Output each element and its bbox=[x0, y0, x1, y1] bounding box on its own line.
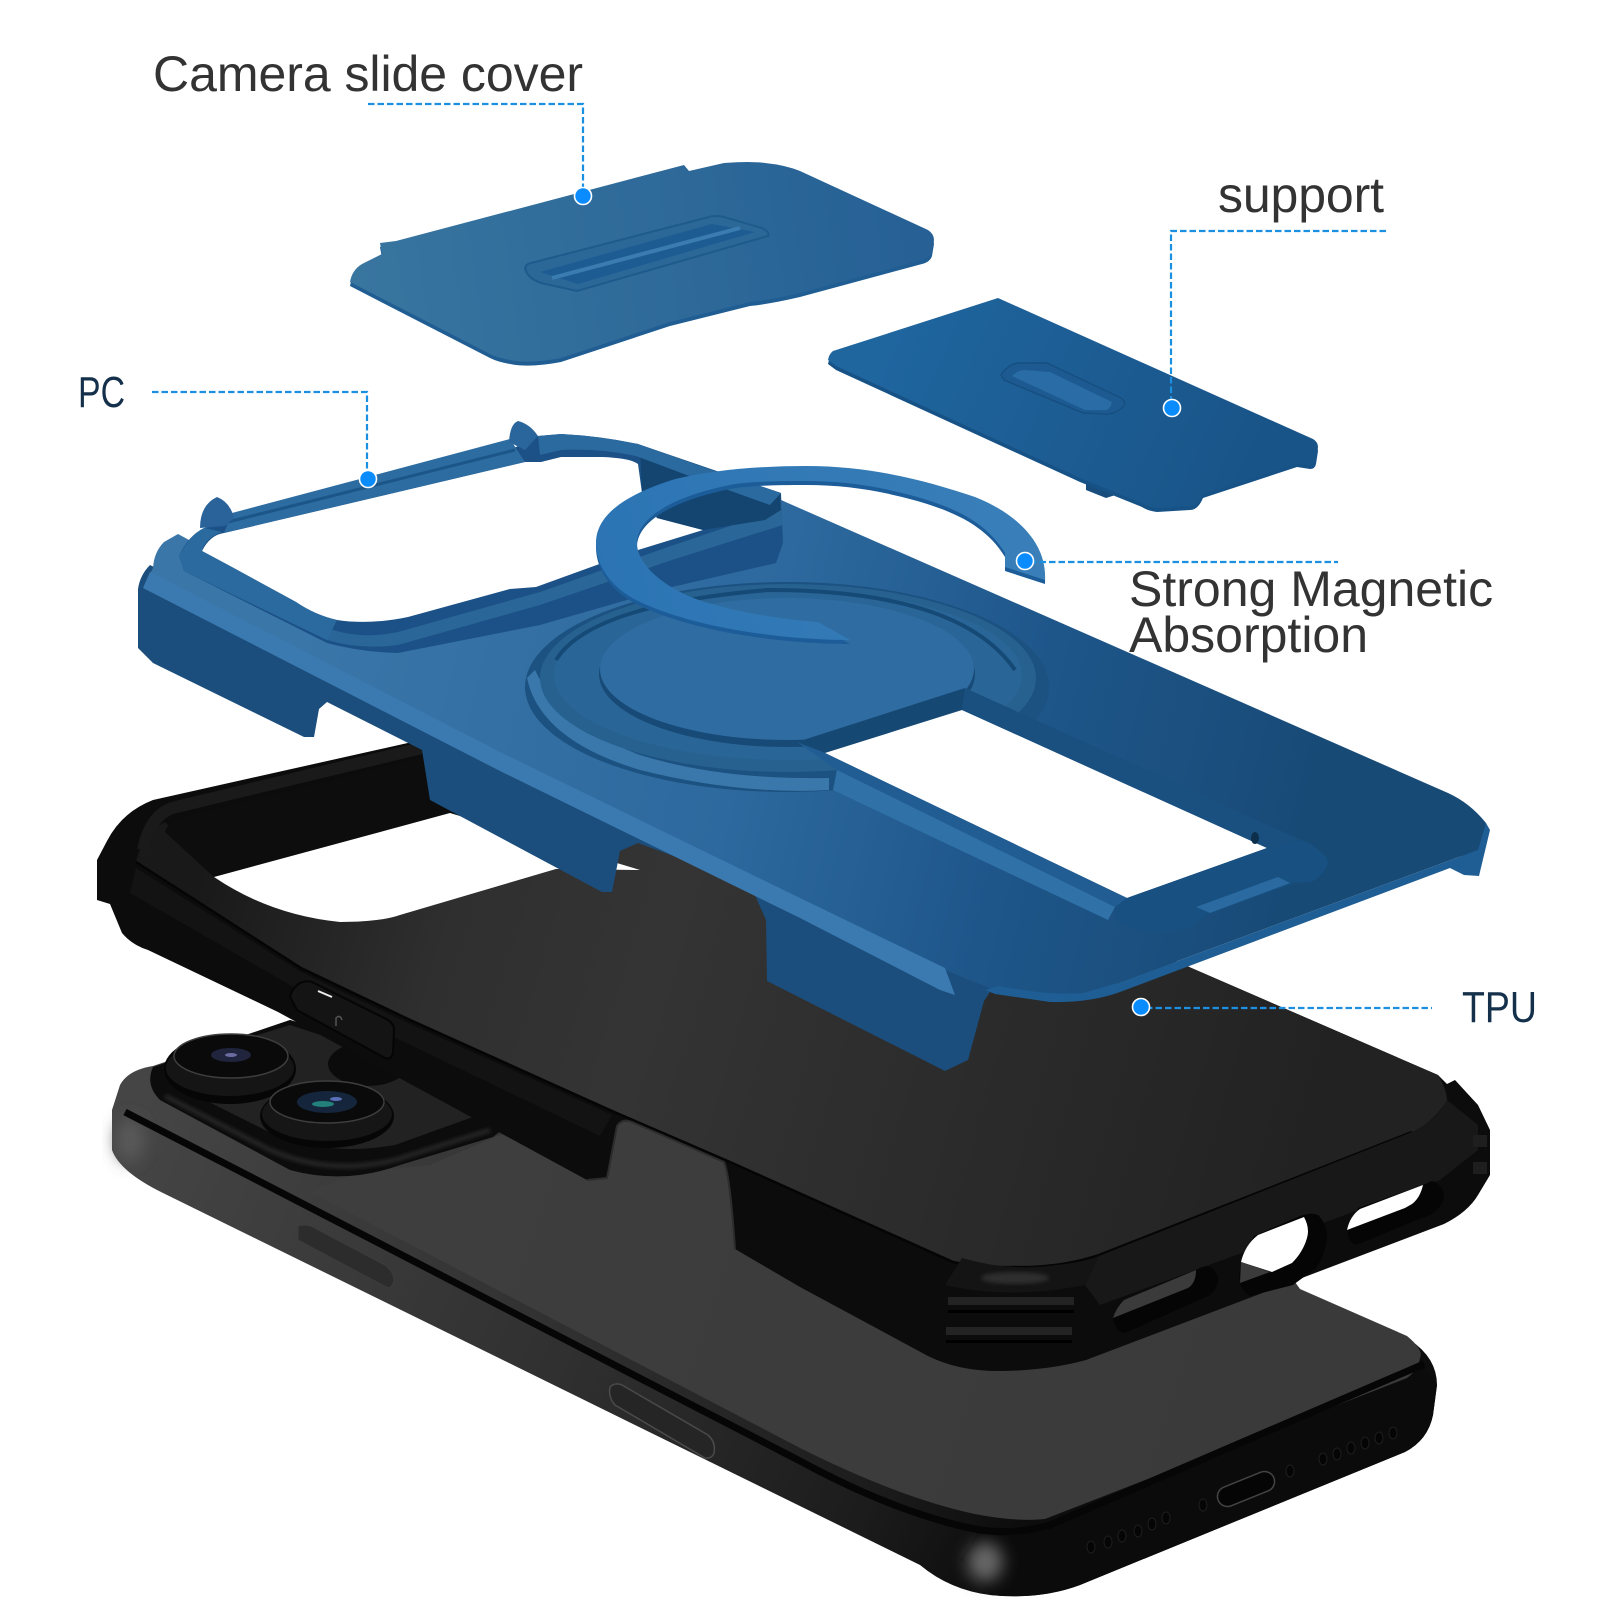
bump highlights bbox=[165, 1096, 490, 1166]
label: Absorption bbox=[1129, 607, 1368, 663]
camera top bar bbox=[224, 439, 525, 533]
magnetic ring bbox=[596, 466, 1045, 644]
dot bbox=[1164, 400, 1180, 416]
slide cover bbox=[350, 162, 934, 366]
bump plate bbox=[170, 1025, 520, 1149]
recess inner dark line bbox=[556, 590, 1015, 670]
label: Strong Magnetic bbox=[1129, 561, 1493, 617]
case frame band bbox=[143, 746, 430, 850]
speaker slot right frame bbox=[1348, 1181, 1444, 1245]
port opening frame bbox=[1239, 1214, 1327, 1296]
panel edge bbox=[828, 302, 1318, 512]
camera inner dark wall bbox=[640, 447, 781, 530]
callout: PC bbox=[78, 368, 376, 488]
label: TPU bbox=[1462, 983, 1537, 1032]
phone back surface bbox=[310, 1100, 1421, 1520]
camera lip band bbox=[184, 500, 783, 647]
usb port bbox=[1214, 1468, 1278, 1510]
window camera hole bbox=[1251, 832, 1259, 844]
PC frame plate bbox=[138, 421, 1490, 1071]
case notch rim bbox=[587, 1121, 735, 1249]
panel clasp bbox=[1086, 480, 1125, 498]
lens: lower bbox=[260, 1081, 394, 1148]
leader line bbox=[1171, 231, 1386, 402]
window white bbox=[825, 710, 1267, 898]
camera bump bbox=[150, 1020, 540, 1176]
plate side walls bbox=[138, 565, 994, 1071]
window bottom frame bbox=[1115, 840, 1328, 933]
case lower side bbox=[1085, 1100, 1478, 1305]
phone corner highlights bbox=[116, 1118, 1003, 1582]
phone body bbox=[112, 1020, 1437, 1596]
lens: upper bbox=[164, 1034, 296, 1104]
phone edge line bbox=[125, 1112, 1424, 1532]
camera window white bbox=[202, 457, 703, 622]
dot bbox=[1132, 998, 1150, 1016]
callout: TPU bbox=[1132, 983, 1537, 1032]
corner grip ribs bbox=[946, 1297, 1074, 1343]
speaker slot left bbox=[1113, 1266, 1218, 1333]
callout: support bbox=[1164, 167, 1386, 416]
right grip bbox=[1473, 1135, 1487, 1174]
callout: strong magnetic absorption bbox=[1016, 552, 1493, 663]
leader line bbox=[368, 104, 583, 190]
disc wall bbox=[599, 601, 975, 747]
speaker holes bbox=[1087, 1427, 1397, 1553]
label: Camera slide cover bbox=[153, 46, 583, 102]
tab right bbox=[509, 421, 538, 450]
camera frame wall bbox=[179, 434, 783, 653]
label: support bbox=[1218, 167, 1384, 223]
cover slot bbox=[525, 216, 768, 291]
window upper left wall bbox=[797, 688, 965, 753]
dot bbox=[574, 188, 592, 204]
recess light rim bbox=[527, 670, 829, 791]
speaker slot left: phone seen bbox=[1113, 1270, 1196, 1318]
third lens bbox=[328, 1042, 408, 1086]
panel thumb grip bbox=[1001, 363, 1125, 414]
disc bbox=[600, 598, 974, 740]
corner frame lip bbox=[179, 528, 337, 640]
magnet recess inner bbox=[554, 590, 1022, 760]
plate front light band bbox=[143, 572, 955, 995]
case power button bbox=[290, 981, 394, 1058]
TPU case bbox=[97, 738, 1490, 1371]
case inner wall bbox=[165, 755, 450, 877]
leader line bbox=[152, 392, 367, 474]
window right wall bbox=[962, 688, 1301, 848]
top bar groove bbox=[228, 450, 515, 522]
leader line bbox=[1030, 561, 1338, 563]
window recess light bbox=[1196, 877, 1290, 913]
dot bbox=[360, 470, 376, 488]
side button bbox=[610, 1384, 714, 1458]
case side lighter band bbox=[130, 868, 612, 1136]
dot bbox=[1016, 552, 1034, 570]
callout: camera slide cover bbox=[153, 46, 592, 204]
cover edge bbox=[350, 166, 934, 366]
case silhouette bbox=[97, 738, 1490, 1371]
port opening: phone seen bbox=[1240, 1262, 1270, 1283]
case corner band bbox=[945, 1256, 1099, 1292]
phone bbox=[112, 1020, 1437, 1596]
magnet rim bbox=[540, 584, 1036, 772]
support panel bbox=[828, 298, 1318, 512]
tab left bbox=[200, 497, 234, 528]
case white opening bbox=[214, 813, 640, 922]
port opening white bbox=[1241, 1217, 1308, 1272]
speaker slot right white bbox=[1347, 1185, 1423, 1230]
window light bar bbox=[833, 770, 1115, 920]
panel body bbox=[828, 298, 1318, 508]
case back plane bbox=[136, 822, 1447, 1267]
plate right edge bbox=[985, 823, 1490, 1002]
ring face bbox=[596, 466, 1045, 640]
plate top surface bbox=[150, 500, 1486, 998]
label: PC bbox=[78, 368, 125, 417]
upper curve lip bbox=[538, 434, 781, 505]
cover body bbox=[350, 162, 934, 362]
magnet recess outer bbox=[525, 582, 1049, 792]
case corner highlight bbox=[981, 1272, 1049, 1284]
phone bottom face bbox=[960, 1365, 1437, 1596]
window lower strip bbox=[797, 742, 1127, 907]
leader line bbox=[1146, 1007, 1432, 1009]
ring edge bbox=[596, 470, 1045, 644]
volume button bbox=[298, 1225, 394, 1288]
case edge line bbox=[136, 862, 1412, 1267]
